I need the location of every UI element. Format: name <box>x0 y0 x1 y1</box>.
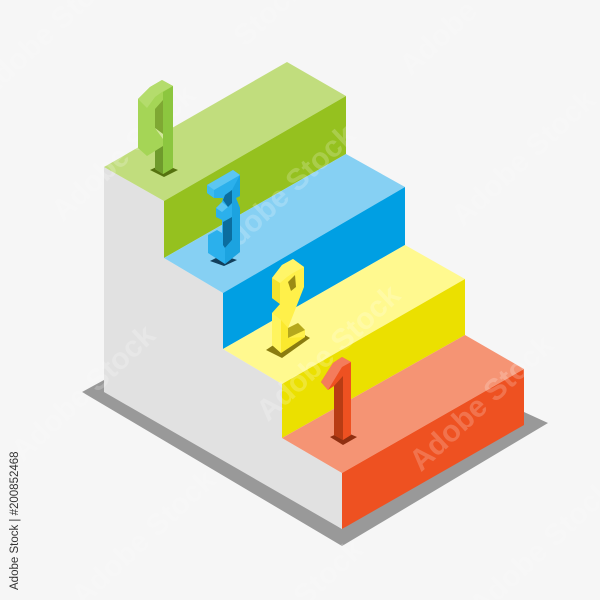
numeral 2 <box>266 259 310 358</box>
step 4: green <box>104 62 346 258</box>
watermarks: Adobe Stock <box>445 83 600 233</box>
watermarks: Adobe Stock <box>45 78 202 228</box>
watermarks: Adobe Stock <box>250 278 407 428</box>
numeral 1 <box>321 357 357 445</box>
watermarks: Adobe Stock <box>403 328 560 478</box>
watermarks: Adobe Stock <box>5 318 162 468</box>
numeral 3 <box>207 170 240 266</box>
ground shadow <box>82 380 548 546</box>
stock id: Adobe Stock | #200852468 <box>9 451 21 590</box>
numeral 4 <box>138 80 178 177</box>
step 2: yellow <box>223 245 465 438</box>
watermarks: Adobe Stock <box>205 118 362 268</box>
staircase side wall <box>104 167 342 529</box>
step 3: blue <box>164 154 405 349</box>
step 1: orange <box>282 335 524 529</box>
